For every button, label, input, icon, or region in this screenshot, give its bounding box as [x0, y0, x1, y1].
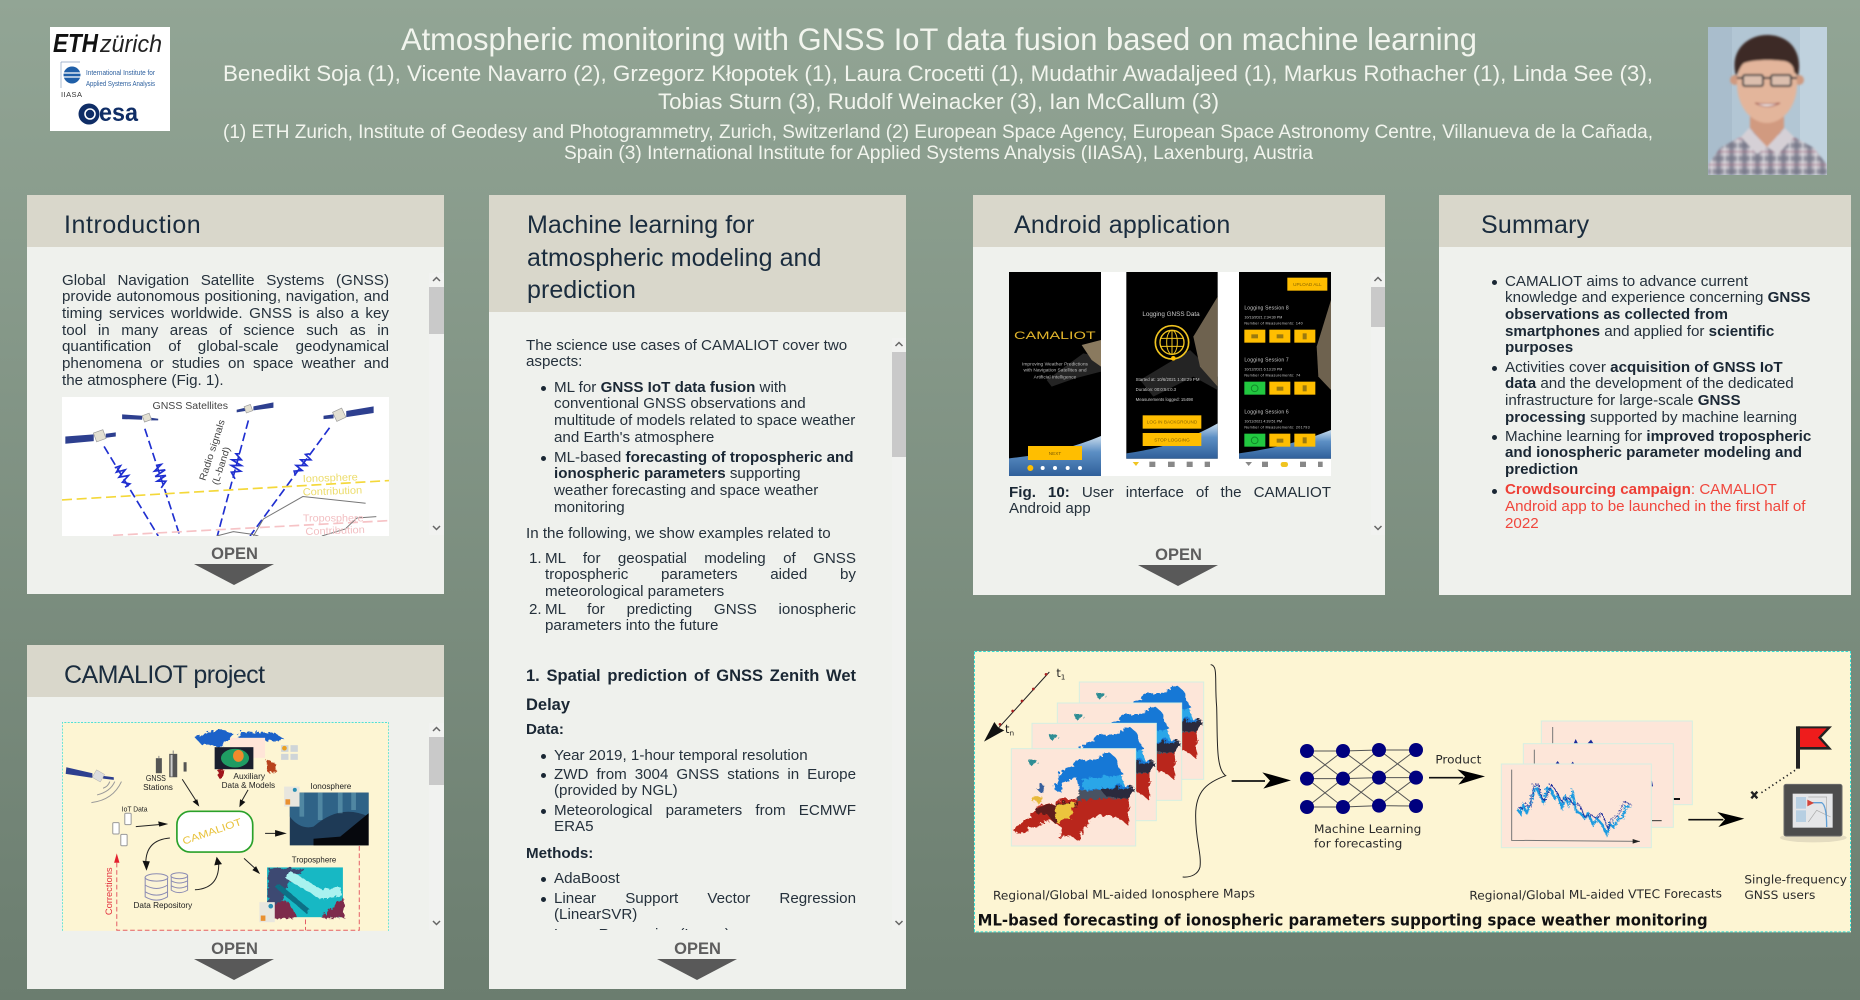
list: summary points: Crowdsourcing campaign: CAMALIOT	[1505, 481, 1777, 498]
list: two aspects: monitoring	[554, 499, 625, 516]
list: two aspects: ML-based forecasting of tropospheric and	[554, 449, 854, 466]
screen 3: sessions: Logging Session 7	[1244, 358, 1289, 364]
screen 3: sessions: Number of Measurements: 140	[1244, 322, 1303, 326]
label: auxiliary data and models: Data & Models	[222, 781, 275, 790]
screen 1: welcome: Artificial Intelligence	[1034, 374, 1077, 380]
list: methods: Linear Support Vector Regression	[554, 890, 856, 907]
screen 3: sessions: Number of Measurements: 74	[1244, 374, 1300, 378]
logos: ETH Zurich, IIASA, ESA: esa	[99, 99, 139, 127]
affiliations	[223, 122, 1653, 164]
text: introduction paragraph: timing services worldwide. GNSS is also a key	[62, 305, 389, 322]
caption: figure 10	[1009, 484, 1331, 517]
stack of ionosphere maps	[1011, 682, 1204, 846]
list: two aspects	[541, 379, 856, 516]
label: troposphere contribution: Troposphere	[303, 514, 364, 525]
authors: Benedikt Soja (1), Vicente Navarro (2), Grzegorz Kłopotek (1), Laura Crocetti (1), Mudathir Awadaljeed (1), Markus Rothacher (1), Linda See (3),	[223, 61, 1653, 86]
image: troposphere satellite view	[259, 854, 343, 922]
GPS device	[1780, 784, 1847, 842]
list: methods: AdaBoost	[554, 870, 620, 887]
list: summary points: Activities cover acquisition of GNSS IoT	[1505, 359, 1783, 376]
list: two aspects: ionospheric parameters supporting	[554, 465, 801, 482]
screen 2: logging: Duration: 00:0:54:0.3	[1136, 387, 1177, 392]
label: product and arrow: Product	[1435, 753, 1482, 767]
CAMALIOT central box	[177, 811, 253, 852]
numbered list: 1.	[529, 550, 542, 567]
subheading: spatial prediction: 1. Spatial prediction of GNSS Zenith Wet	[526, 666, 856, 684]
label: methods: Methods:	[526, 845, 593, 862]
label: IoT data: IoT Data	[122, 806, 148, 813]
stack of VTEC forecasts	[1501, 721, 1692, 848]
panel: CAMALIOT project	[27, 645, 444, 989]
image: ionosphere aurora: Ionosphere	[311, 781, 352, 791]
scrollbar	[1371, 273, 1385, 535]
authors: Tobias Sturn (3), Rudolf Weinacker (3), Ian McCallum (3)	[658, 89, 1219, 114]
right part of diagram	[1429, 721, 1847, 903]
GNSS stations icon	[156, 751, 187, 777]
screen 1: welcome: with Navigation Satellites and	[1023, 368, 1087, 374]
logos: ETH Zurich, IIASA, ESA: IIASA	[61, 90, 82, 99]
open button	[657, 940, 737, 980]
label: radio signals: (L-band)	[210, 446, 233, 486]
panel: machine learning	[489, 195, 906, 989]
open button: OPEN	[211, 940, 258, 958]
list: summary points: smartphones and applied for scientific	[1505, 323, 1774, 340]
open button: OPEN	[674, 940, 721, 958]
figure: app screenshots	[1009, 272, 1331, 476]
list: summary points: processing supported by machine learning	[1505, 409, 1797, 426]
list: summary points: Machine learning for improved tropospheric	[1505, 428, 1811, 445]
screen 1: welcome: NEXT	[1049, 451, 1061, 456]
screen 2: logging: Started at: 10/6/2021 1:48:29 PM	[1136, 377, 1200, 382]
data repository icon	[145, 873, 188, 900]
list: two aspects: conventional GNSS observations and	[554, 395, 806, 412]
scrollable content: parameters into the future	[545, 617, 718, 634]
time axis: 1	[1061, 673, 1065, 682]
caption: figure 10: Android app	[1009, 500, 1091, 517]
label: GNSS stations: Stations	[143, 783, 173, 792]
scrollbar	[892, 338, 906, 930]
time axis: n	[1009, 729, 1014, 738]
text: science use cases: The science use cases of CAMALIOT cover two	[526, 337, 847, 354]
corrections path: Corrections	[104, 867, 114, 915]
open button	[194, 545, 274, 585]
title: Atmospheric monitoring with GNSS IoT data fusion based on machine learning	[401, 21, 1477, 57]
label: GNSS stations: GNSS	[146, 774, 166, 783]
list: data: ERA5	[554, 818, 594, 835]
subheading: spatial prediction: Delay	[526, 696, 570, 714]
label: single-frequency GNSS users: GNSS users	[1744, 888, 1815, 902]
scrollbar	[429, 723, 444, 930]
list: data	[541, 747, 856, 835]
screen 3: sessions	[1239, 272, 1331, 467]
header: title, authors and affiliations	[223, 21, 1653, 164]
list: two aspects: weather forecasting and space weather	[554, 482, 818, 499]
heading: machine learning for atmospheric modeling and prediction	[527, 211, 821, 304]
open button: OPEN	[1155, 546, 1202, 564]
text: introduction paragraph: Global Navigation Satellite Systems (GNSS)	[62, 272, 389, 289]
numbered list: tropospheric parameters aided by	[545, 566, 856, 583]
list: summary points: 2022	[1505, 515, 1539, 532]
heading: machine learning for atmospheric modeling and prediction: atmospheric modeling and	[527, 244, 821, 272]
list: data: (provided by NGL)	[554, 782, 678, 799]
screen 3: sessions: Number of Measurements: 201793	[1244, 426, 1310, 430]
CAMALIOT central box: CAMALIOT	[181, 817, 243, 848]
affiliations: (1) ETH Zurich, Institute of Geodesy and Photogrammetry, Zurich, Switzerland (2) European Space Agency, European Space Astronomy Centre, Villanueva de la Cañada,	[223, 122, 1653, 143]
screen 2: logging: LOG IN BACKGROUND	[1147, 420, 1198, 425]
label: VTEC forecasts: Regional/Global ML-aided VTEC Forecasts	[1469, 886, 1722, 903]
label: auxiliary data and models	[222, 772, 275, 790]
screen 3: sessions: Logging Session 6	[1244, 410, 1289, 416]
screen 2: logging: Measurements logged: 15498	[1136, 397, 1194, 402]
caption: ML-based forecasting: ML-based forecasting of ionospheric parameters supporting space weather monitoring	[978, 911, 1708, 930]
text: introduction paragraph: phenomena or studies on space weather and	[62, 355, 389, 372]
figure: ML-based forecasting of ionospheric parameters	[974, 651, 1851, 932]
list: two aspects: multitude of models related to space weather	[554, 412, 855, 429]
label: single-frequency GNSS users	[1744, 873, 1847, 902]
list: summary points: prediction	[1505, 461, 1578, 478]
screen 3: sessions: Logging Session 8	[1244, 306, 1289, 312]
list: summary points: Android app to be launched in the first half of	[1505, 498, 1806, 515]
panel: android application	[973, 195, 1385, 595]
list: summary points: data and the development of the dedicated	[1505, 375, 1794, 392]
scrollbar	[429, 273, 444, 535]
screen 3: sessions: 10/12/2021 6:13:20 PM	[1244, 367, 1282, 371]
corrections path	[104, 845, 359, 930]
caption: figure 10: Fig. 10: User interface of the CAMALIOT	[1009, 484, 1331, 501]
curly brace	[1183, 665, 1226, 877]
label: troposphere contribution	[303, 514, 365, 538]
label: auxiliary data and models: Auxiliary	[233, 772, 265, 781]
open button	[194, 940, 274, 980]
text: science use cases: aspects:	[526, 353, 582, 370]
open button: OPEN	[211, 545, 258, 563]
scrollable content	[526, 337, 856, 930]
logos: ETH Zurich, IIASA, ESA: ETH	[53, 28, 99, 58]
text: introduction paragraph	[62, 272, 389, 389]
list: two aspects: ML for GNSS IoT data fusion with	[554, 379, 786, 396]
text: in the following: In the following, we show examples related to	[526, 525, 831, 542]
heading: summary: Summary	[1481, 211, 1589, 239]
arrows	[136, 779, 282, 890]
label: radio signals	[198, 418, 233, 486]
label: GNSS satellites: GNSS Satellites	[153, 401, 228, 412]
list: summary points: knowledge and experience concerning GNSS	[1505, 289, 1811, 306]
label: ionosphere contribution: Contribution	[303, 485, 363, 499]
screen 3: sessions: 10/13/2021 2:34:30 PM	[1244, 315, 1282, 319]
open button	[1138, 546, 1218, 586]
flag and route	[1751, 726, 1832, 798]
numbered list	[529, 550, 856, 634]
label: data: Data:	[526, 721, 564, 738]
list: data: Meteorological parameters from ECMWF	[554, 802, 856, 819]
heading: machine learning for atmospheric modeling and prediction: Machine learning for	[527, 211, 755, 239]
text: introduction paragraph: quantification of global-scale geodynamical	[62, 338, 389, 355]
text: science use cases	[526, 337, 847, 370]
label: ionosphere contribution: Ionosphere	[303, 472, 358, 485]
screen 1: welcome: CAMALIOT	[1014, 330, 1096, 342]
heading: introduction: Introduction	[64, 211, 201, 239]
label: ionosphere maps: Regional/Global ML-aided Ionosphere Maps	[993, 886, 1255, 903]
logos: ETH Zurich, IIASA, ESA: International Institute for	[86, 68, 155, 77]
screen 2: logging: Logging GNSS Data	[1142, 311, 1200, 318]
numbered list: ML for geospatial modeling of GNSS	[545, 550, 856, 567]
numbered list: 2.	[529, 601, 542, 618]
list: methods	[541, 870, 856, 930]
label: radio signals: Radio signals	[198, 418, 228, 482]
label: machine learning for forecasting	[1314, 822, 1421, 851]
screen 1: welcome: Improving Weather Predictions	[1022, 361, 1089, 367]
list: two aspects: and Earth's atmosphere	[554, 429, 714, 446]
label: machine learning for forecasting: for forecasting	[1314, 837, 1402, 851]
list: summary points: observations as collected from	[1505, 306, 1728, 323]
panel: introduction	[27, 195, 444, 594]
list: summary points: infrastructure for large-scale GNSS	[1505, 392, 1741, 409]
phones icon	[113, 813, 131, 846]
figure: GNSS satellites and signal delays	[62, 397, 389, 536]
logos: ETH Zurich, IIASA, ESA: Applied Systems Analysis	[86, 79, 155, 88]
logos: ETH Zurich, IIASA, ESA: zürich	[99, 31, 162, 58]
label: ionosphere contribution	[303, 472, 363, 499]
image: troposphere satellite view: Troposphere	[292, 854, 337, 864]
list: data: ZWD from 3004 GNSS stations in Europe	[554, 766, 856, 783]
list: data: Year 2019, 1-hour temporal resolution	[554, 747, 808, 764]
authors	[223, 61, 1653, 114]
numbered list: meteorological parameters	[545, 583, 724, 600]
list: methods: (LinearSVR)	[554, 906, 637, 923]
screen 2: logging: STOP LOGGING	[1154, 437, 1190, 442]
label: GNSS stations	[143, 774, 173, 792]
satellite icon	[66, 767, 121, 803]
screen 3: sessions: 10/11/2021 4:39:51 PM	[1244, 419, 1282, 423]
heading: machine learning for atmospheric modeling and prediction: prediction	[527, 276, 636, 304]
screen 3: sessions: UPLOAD ALL	[1293, 282, 1322, 287]
numbered list: ML for predicting GNSS ionospheric	[545, 601, 856, 618]
label: single-frequency GNSS users: Single-frequency	[1744, 873, 1847, 887]
figure: CAMALIOT system diagram	[62, 722, 389, 931]
list: summary points	[1492, 273, 1811, 532]
world map and auxiliary models	[194, 729, 298, 778]
screen 1: welcome	[1009, 272, 1101, 476]
neural network	[1300, 743, 1423, 814]
label: product and arrow	[1429, 753, 1485, 785]
text: introduction paragraph: provide autonomous positioning, navigation, and	[62, 288, 389, 305]
subheading: spatial prediction	[526, 666, 856, 714]
affiliations: Spain (3) International Institute for Applied Systems Analysis (IIASA), Laxenburg, Austria	[564, 143, 1313, 164]
portrait photo	[1708, 27, 1827, 175]
screen 2: logging	[1126, 272, 1218, 467]
list: summary points: CAMALIOT aims to advance current	[1505, 273, 1748, 290]
time axis: t	[1056, 666, 1061, 680]
text: introduction paragraph: the atmosphere (Fig. 1).	[62, 372, 224, 389]
logos: ETH Zurich, IIASA, ESA	[50, 27, 170, 131]
arrow to network	[1232, 772, 1291, 789]
image: ionosphere aurora	[284, 781, 369, 845]
time axis	[984, 666, 1065, 742]
time axis: t	[1005, 722, 1009, 736]
heading: android application: Android application	[1014, 211, 1230, 239]
arrow to users	[1688, 812, 1744, 827]
text: introduction paragraph: tool in many areas of science such as in	[62, 322, 389, 339]
label: machine learning for forecasting: Machine Learning	[1314, 822, 1421, 836]
panel: summary	[1439, 195, 1851, 595]
list: summary points: and ionospheric parameter modeling and	[1505, 444, 1802, 461]
list: summary points: purposes	[1505, 339, 1573, 356]
label: data repository: Data Repository	[133, 901, 192, 910]
heading: CAMALIOT project: CAMALIOT project	[64, 661, 265, 689]
